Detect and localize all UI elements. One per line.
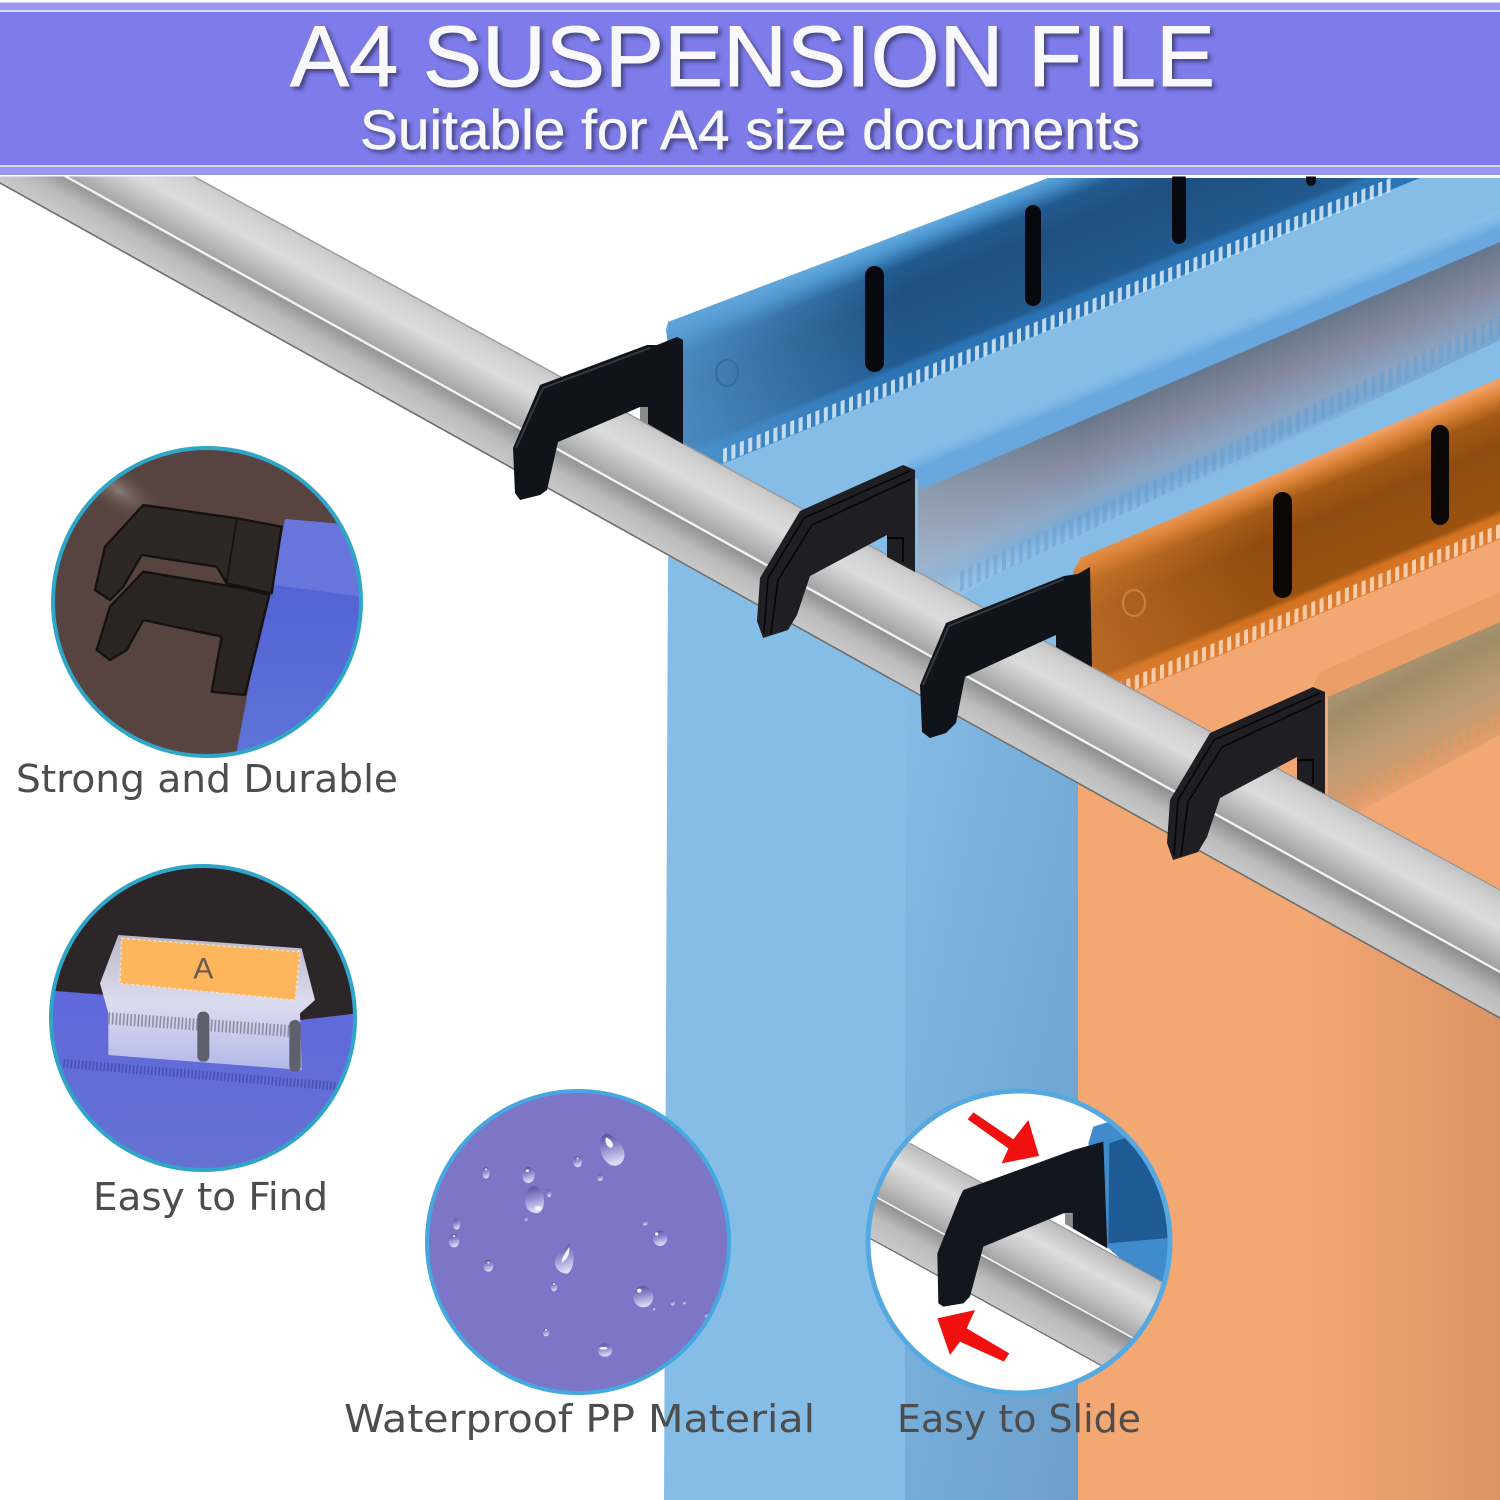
- holder slots: [197, 1012, 301, 1072]
- top lip: [903, 211, 1500, 490]
- clip 3: [920, 567, 1092, 738]
- circle: easy to find: [43, 860, 363, 1183]
- frosted orange panel: [1328, 622, 1500, 822]
- clip 4: [1167, 687, 1325, 860]
- rail bottom edge: [870, 1238, 1102, 1366]
- clip seams: [227, 519, 237, 582]
- frosted panel: [918, 238, 1500, 602]
- frost left highlight: [918, 412, 1080, 602]
- frosted orange perforation: [1345, 722, 1500, 804]
- tab left shading: [668, 234, 900, 473]
- lower clip: [97, 572, 269, 695]
- frosted orange lip: [1313, 592, 1500, 697]
- faint perforations: [960, 325, 1500, 582]
- orange perforation teeth: [1118, 531, 1500, 690]
- clip gray leg: [1065, 1214, 1073, 1228]
- clip 2: [757, 465, 915, 638]
- orange tab left shading: [1080, 481, 1260, 703]
- subtitle: Suitable for A4 size documents: [360, 98, 1140, 161]
- frosted blue folder: [903, 211, 1500, 1500]
- orange tab hole: [1123, 590, 1145, 616]
- blue folder body: [664, 178, 1500, 1500]
- tab slots: [865, 172, 1316, 372]
- label: easy to slide: Easy to Slide: [897, 1397, 1141, 1441]
- folder perforations: [63, 1063, 340, 1087]
- orange folder: [1073, 378, 1500, 1500]
- label letter: A: [193, 952, 213, 985]
- drop highlights: [453, 1137, 658, 1350]
- circle: strong and durable: [50, 441, 365, 760]
- rail upper face: [65, 176, 1500, 972]
- label: strong and durable: Strong and Durable: [16, 757, 398, 801]
- rail highlight: [877, 1197, 1133, 1338]
- black clips: [513, 337, 1325, 860]
- front orange body: [1312, 915, 1500, 1500]
- label: easy to find: Easy to Find: [93, 1175, 328, 1219]
- orange tab: [1073, 378, 1500, 703]
- rail top edge: [910, 1142, 1162, 1282]
- perforated teeth: [723, 183, 1395, 456]
- orange body: [1078, 380, 1500, 1500]
- title: A4 SUSPENSION FILE: [290, 9, 1215, 105]
- blue folder tab: [666, 178, 1420, 473]
- metal rail: [0, 176, 1500, 1018]
- blue folder: [53, 991, 353, 1168]
- rail lower face: [0, 176, 1500, 1018]
- tab hole: [716, 360, 738, 386]
- label: waterproof material: Waterproof PP Material: [344, 1397, 815, 1441]
- blue folder dark band: [1108, 1138, 1168, 1244]
- blue folder corner: [235, 519, 365, 760]
- clip: [937, 1142, 1107, 1307]
- header banner: [0, 0, 1500, 176]
- back blue folder: [664, 172, 1500, 1500]
- rail lower edge: [0, 183, 1500, 1018]
- perforations in holder: [108, 1018, 300, 1032]
- rail lower face: [870, 1198, 1132, 1365]
- rail upper face: [878, 1142, 1162, 1337]
- front blue body: [905, 690, 1078, 1500]
- red arrow bottom: [937, 1310, 1009, 1362]
- yellow label: [120, 938, 300, 1000]
- rail ridge highlight: [65, 176, 1500, 972]
- rail upper edge: [193, 176, 1500, 890]
- circle: waterproof material: [427, 1091, 729, 1393]
- upper clip: [95, 505, 282, 600]
- circle: easy to slide: [866, 1088, 1172, 1396]
- blue folder base: [1088, 1122, 1168, 1282]
- red arrow top: [968, 1112, 1039, 1163]
- lighter band on blue: [273, 519, 365, 597]
- orange slots: [1273, 425, 1449, 598]
- water drops: [449, 1133, 709, 1357]
- clear tab holder: [100, 935, 315, 1070]
- clip 1: [513, 337, 683, 500]
